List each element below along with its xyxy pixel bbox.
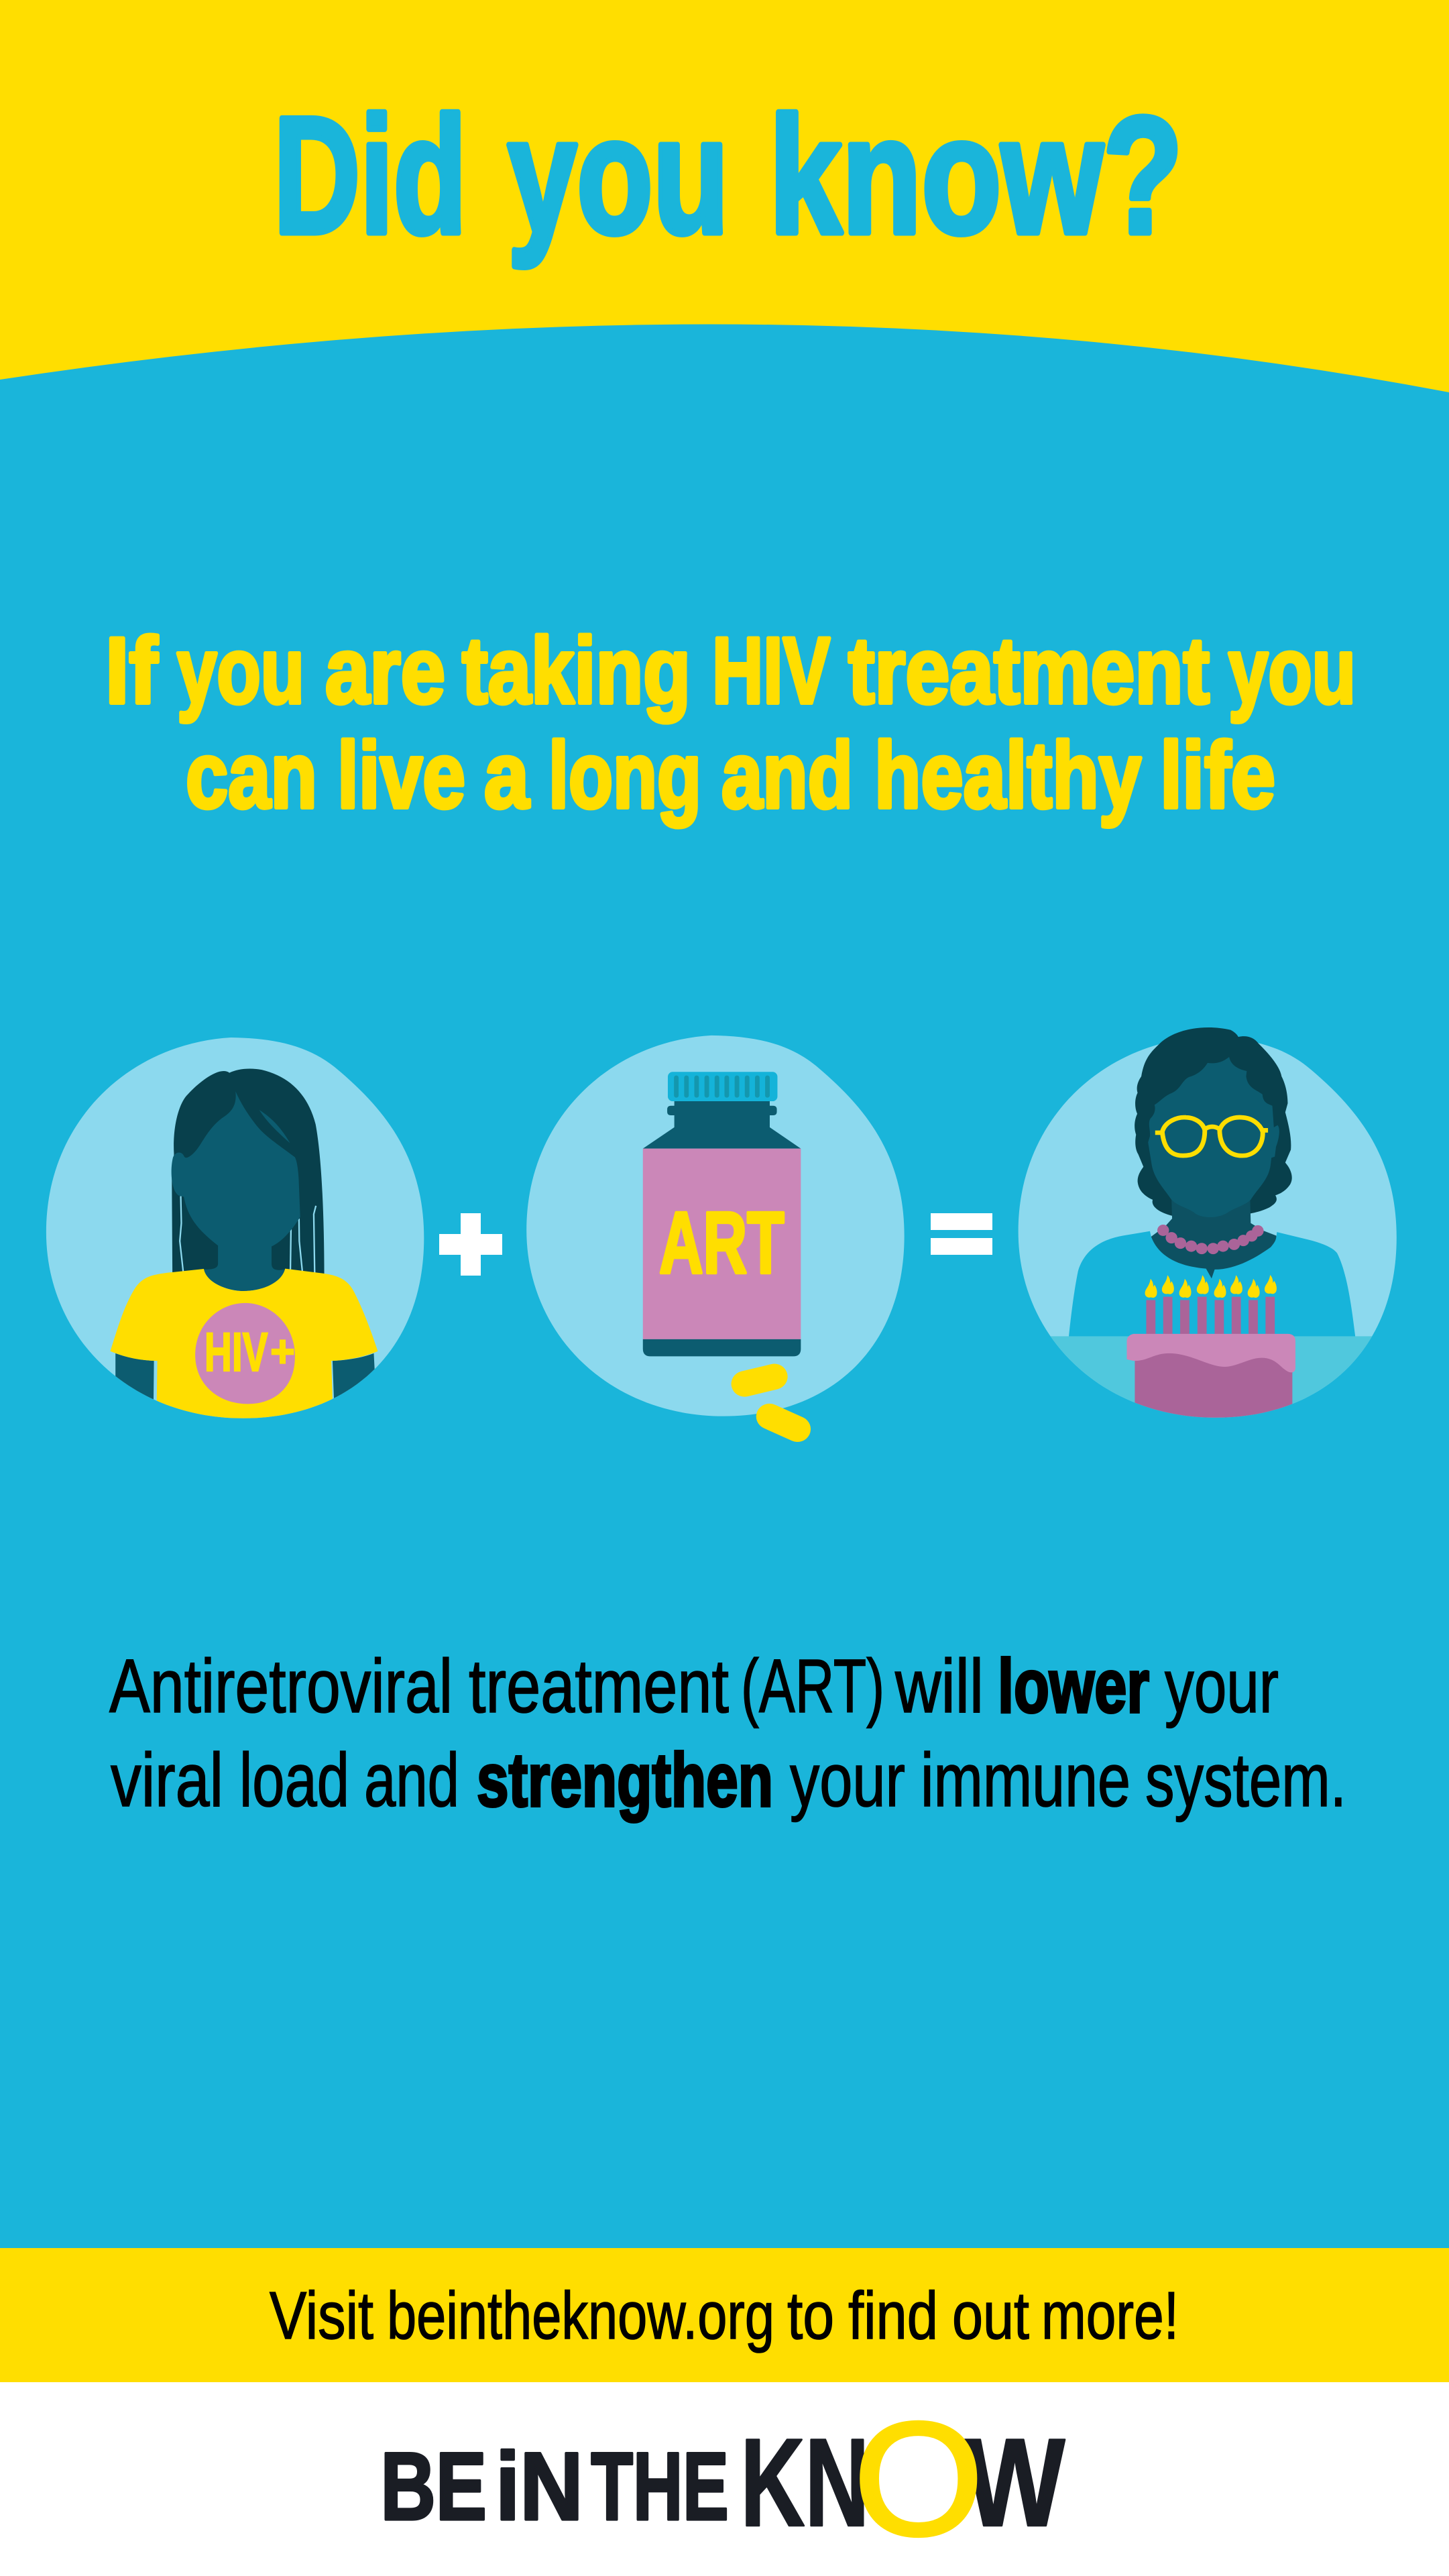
body text: Antiretroviral [109, 1644, 453, 1728]
hair [172, 1068, 325, 1276]
call-to-action text: more! [1041, 2278, 1179, 2353]
logo: Be in the Know [380, 2389, 1066, 2569]
body text: viral [111, 1738, 223, 1822]
logo: Be in the Know: iN [496, 2432, 583, 2540]
illustration: woman with HIV+ t-shirt [46, 1038, 424, 1420]
cake [1135, 1353, 1293, 1418]
table [1051, 1336, 1372, 1404]
subheading: a [484, 722, 530, 828]
call-to-action text: out [952, 2278, 1029, 2353]
equals sign [931, 1213, 992, 1255]
body text: load [239, 1738, 349, 1822]
subheading: long [548, 722, 701, 828]
logo: Be in the Know: KN [740, 2412, 869, 2553]
subheading: are [325, 618, 445, 723]
logo: Be in the Know: O [854, 2389, 984, 2569]
subheading: If [105, 618, 158, 723]
body text: your [790, 1738, 905, 1822]
body text: lower [998, 1644, 1149, 1728]
blouse [1069, 1231, 1355, 1336]
call-to-action text: find [848, 2278, 938, 2353]
title: know? [769, 82, 1183, 268]
body text: will [894, 1644, 984, 1728]
hair highlight [259, 1110, 290, 1143]
call-to-action text: beintheknow.org [387, 2278, 774, 2353]
call-to-action text [270, 2278, 1179, 2353]
hair [1135, 1027, 1292, 1216]
background: yellow header [0, 0, 1449, 416]
subheading: healthy [874, 722, 1141, 828]
subheading: treatment [848, 618, 1210, 723]
background blob [526, 1035, 905, 1416]
logo: Be in the Know: THE [591, 2432, 729, 2540]
bottle label [643, 1149, 801, 1339]
pills [744, 1377, 797, 1429]
cake frosting [1126, 1334, 1295, 1372]
illustration: ART pill bottle [526, 1035, 905, 1429]
title: you [508, 82, 729, 268]
badge text: + [270, 1327, 295, 1377]
background blob [46, 1038, 424, 1418]
subheading: HIV [712, 618, 830, 723]
arms and t-shirt [110, 1269, 378, 1420]
hair strand gaps [180, 1196, 316, 1274]
background: blue curved panel [0, 325, 1449, 2248]
body text: and [364, 1738, 459, 1822]
neck [1151, 1199, 1276, 1278]
subheading: life [1160, 722, 1275, 828]
badge text: HIV [205, 1322, 268, 1383]
call-to-action text: Visit [270, 2278, 373, 2353]
label text: ART [659, 1194, 785, 1292]
bottle base [643, 1339, 801, 1356]
bottle neck and shoulder [643, 1101, 801, 1149]
logo: Be in the Know: BE [380, 2432, 487, 2540]
bottle cap [668, 1072, 777, 1101]
subheading: you [1228, 618, 1356, 723]
candle flames [1145, 1275, 1277, 1298]
title: Did [274, 82, 467, 268]
plus sign [439, 1213, 502, 1276]
body text [109, 1644, 1346, 1822]
body text: immune [921, 1738, 1131, 1822]
cap ridges [674, 1076, 770, 1098]
candles [1146, 1297, 1275, 1335]
glasses [1155, 1117, 1268, 1156]
t-shirt badge [195, 1303, 295, 1404]
body text: treatment [469, 1644, 729, 1728]
illustration: older woman with birthday cake [1012, 1027, 1413, 1424]
title [274, 82, 1183, 268]
face [1148, 1057, 1279, 1217]
body text: strengthen [477, 1738, 773, 1822]
body text: (ART) [741, 1644, 884, 1728]
subheading [105, 618, 1356, 828]
body text: your [1165, 1644, 1279, 1728]
face and neck [172, 1091, 300, 1291]
background blob [1019, 1037, 1397, 1418]
footer call-to-action band [0, 2248, 1449, 2382]
subheading: can [186, 722, 317, 828]
subheading: and [721, 722, 853, 828]
body text: system. [1145, 1738, 1346, 1822]
text: W [965, 2412, 1066, 2553]
necklace [1157, 1225, 1264, 1254]
subheading: live [337, 722, 465, 828]
subheading: taking [462, 618, 691, 723]
call-to-action text: to [787, 2278, 834, 2353]
subheading: you [177, 618, 304, 723]
